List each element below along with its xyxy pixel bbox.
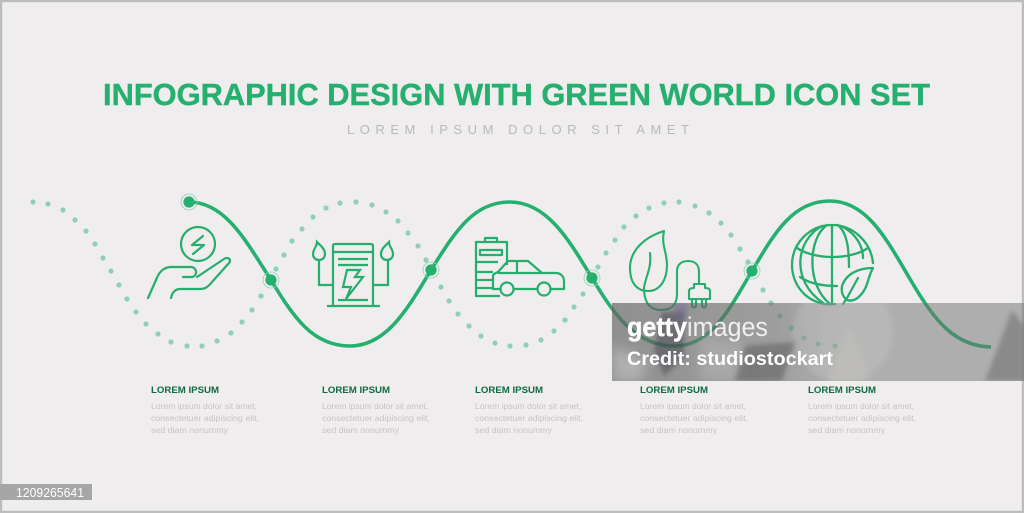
step 4 text: sed diam nonummy [640,425,718,435]
icon: globe with leaf [792,225,873,304]
step 4 text [640,385,748,435]
step 4 text: LOREM IPSUM [640,385,708,396]
step 1 text: consectetuer adipiscing elit, [151,413,259,423]
step 4 text: Lorem ipsum dolor sit amet, [640,401,746,411]
step 4 text: consectetuer adipiscing elit, [640,413,748,423]
icon: leaf with plug [630,231,710,310]
title: INFOGRAPHIC DESIGN WITH GREEN WORLD ICON SET [103,77,930,112]
step 3 text: consectetuer adipiscing elit, [475,413,583,423]
image id badge: 1209265641 [16,485,84,500]
step 5 text: Lorem ipsum dolor sit amet, [808,401,914,411]
step 2 text: LOREM IPSUM [322,385,390,396]
step 5 text: LOREM IPSUM [808,385,876,396]
icon: hand holding energy [148,227,230,298]
step 1 text: sed diam nonummy [151,425,229,435]
step 2 text [322,385,430,435]
step 5 text [808,385,916,435]
step 1 text: LOREM IPSUM [151,385,219,396]
step 2 text: consectetuer adipiscing elit, [322,413,430,423]
subtitle: LOREM IPSUM DOLOR SIT AMET [347,122,689,137]
step 3 text: Lorem ipsum dolor sit amet, [475,401,581,411]
icon: battery and electric car [476,238,564,296]
step 1 text: Lorem ipsum dolor sit amet, [151,401,257,411]
step markers [181,194,760,288]
icon: charging station [313,242,393,306]
step 2 text: Lorem ipsum dolor sit amet, [322,401,428,411]
watermark credit: Credit: studiostockart [627,349,834,370]
step 5 text: sed diam nonummy [808,425,886,435]
step 2 text: sed diam nonummy [322,425,400,435]
step 3 text [475,385,583,435]
watermark band [612,303,1024,381]
step 3 text: sed diam nonummy [475,425,553,435]
step 5 text: consectetuer adipiscing elit, [808,413,916,423]
step 1 text [151,385,259,435]
step 3 text: LOREM IPSUM [475,385,543,396]
solid wave line [189,201,991,347]
dotted wave line [30,199,838,349]
watermark logo: gettyimages [627,312,768,342]
